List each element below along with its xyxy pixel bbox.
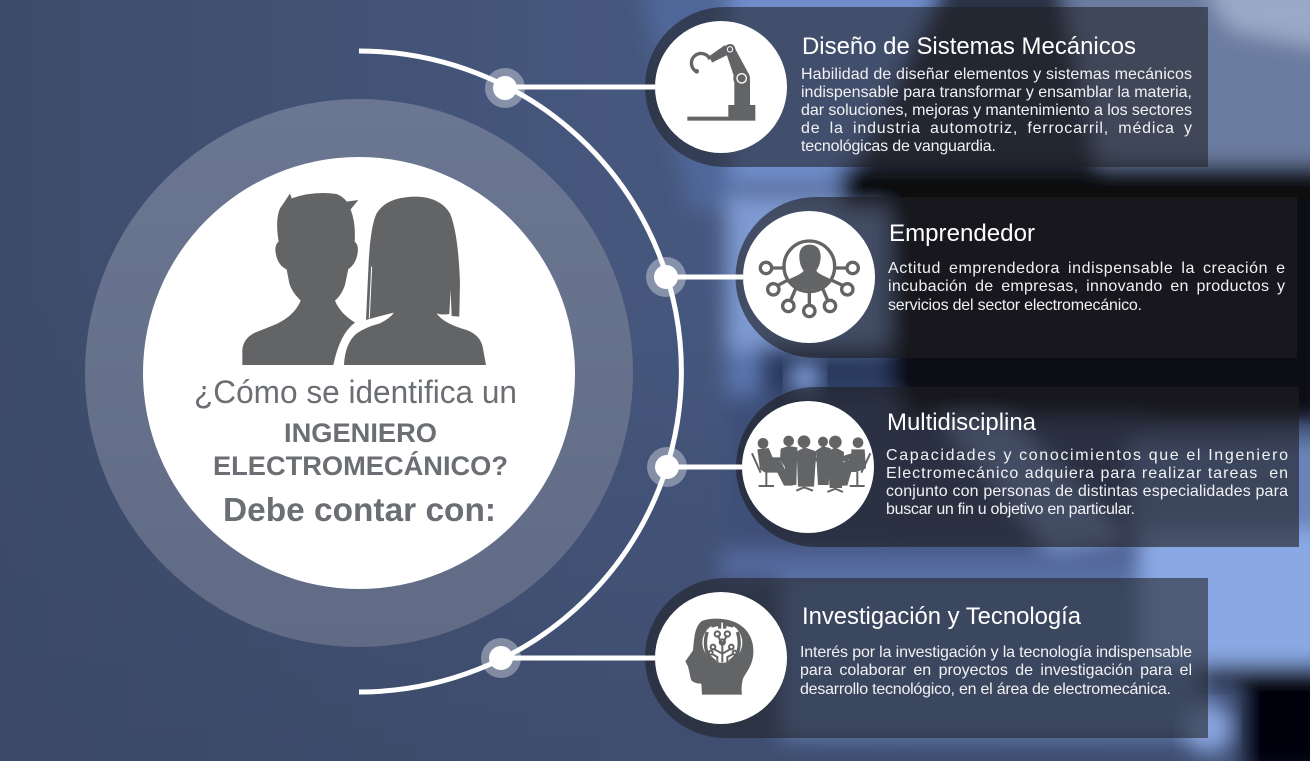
heading: question line 3: ELECTROMECÁNICO?: [213, 450, 508, 481]
icon: robot arm: [687, 44, 755, 121]
description: dar soluciones, mejoras y mantenimiento a los sectores: [801, 102, 1192, 119]
big ring behind centre circle: [85, 99, 633, 647]
heading: question line 1: ¿Cómo se identifica un: [194, 374, 517, 410]
panel: Emprendedor: [736, 197, 1297, 358]
description: conjunto con personas de distintas especialidades para: [886, 483, 1288, 500]
icon: entrepreneur network: [760, 241, 858, 317]
panel: Investigación y Tecnología: [645, 578, 1208, 738]
icon: head with circuit brain: [685, 619, 753, 695]
title: Diseño de Sistemas Mecánicos: [802, 33, 1136, 60]
description: [800, 644, 1192, 698]
description: Habilidad de diseñar elementos y sistemas mecánicos: [801, 66, 1192, 83]
icon: man and woman silhouettes: [242, 193, 486, 365]
title: Multidisciplina: [887, 409, 1037, 436]
description: Actitud emprendedora indispensable la creación e: [888, 260, 1285, 277]
description: [886, 447, 1288, 518]
panel: Diseño de Sistemas Mecánicos: [645, 7, 1208, 167]
icon: team meeting: [752, 435, 870, 492]
description: [801, 66, 1192, 155]
heading: question line 2: INGENIERO: [284, 418, 437, 448]
description: incubación de empresas, innovando en productos y: [888, 278, 1285, 295]
description: desarrollo tecnológico, en el área de electromecánica.: [800, 681, 1171, 698]
description: buscar un fin u objetivo en particular.: [886, 501, 1135, 518]
description: de la industria automotriz, ferrocarril, médica y: [801, 120, 1192, 137]
description: Capacidades y conocimientos que el Ingeniero: [886, 447, 1288, 464]
centre white circle: [143, 157, 575, 589]
description: servicios del sector electromecánico.: [888, 297, 1142, 314]
description: Electromecánico adquiera para realizar tareas en: [886, 465, 1288, 482]
title: Emprendedor: [889, 220, 1035, 247]
panel: Multidisciplina: [736, 387, 1299, 547]
title: Investigación y Tecnología: [802, 603, 1082, 630]
description: Interés por la investigación y la tecnología indispensable: [800, 644, 1192, 661]
arc connector with nodes: [359, 51, 743, 692]
description: [888, 260, 1285, 314]
description: tecnológicas de vanguardia.: [801, 138, 996, 155]
description: indispensable para transformar y ensamblar la materia,: [801, 84, 1192, 101]
heading: debe contar con: Debe contar con:: [223, 491, 496, 528]
description: para colaborar en proyectos de investigación para el: [800, 662, 1192, 679]
